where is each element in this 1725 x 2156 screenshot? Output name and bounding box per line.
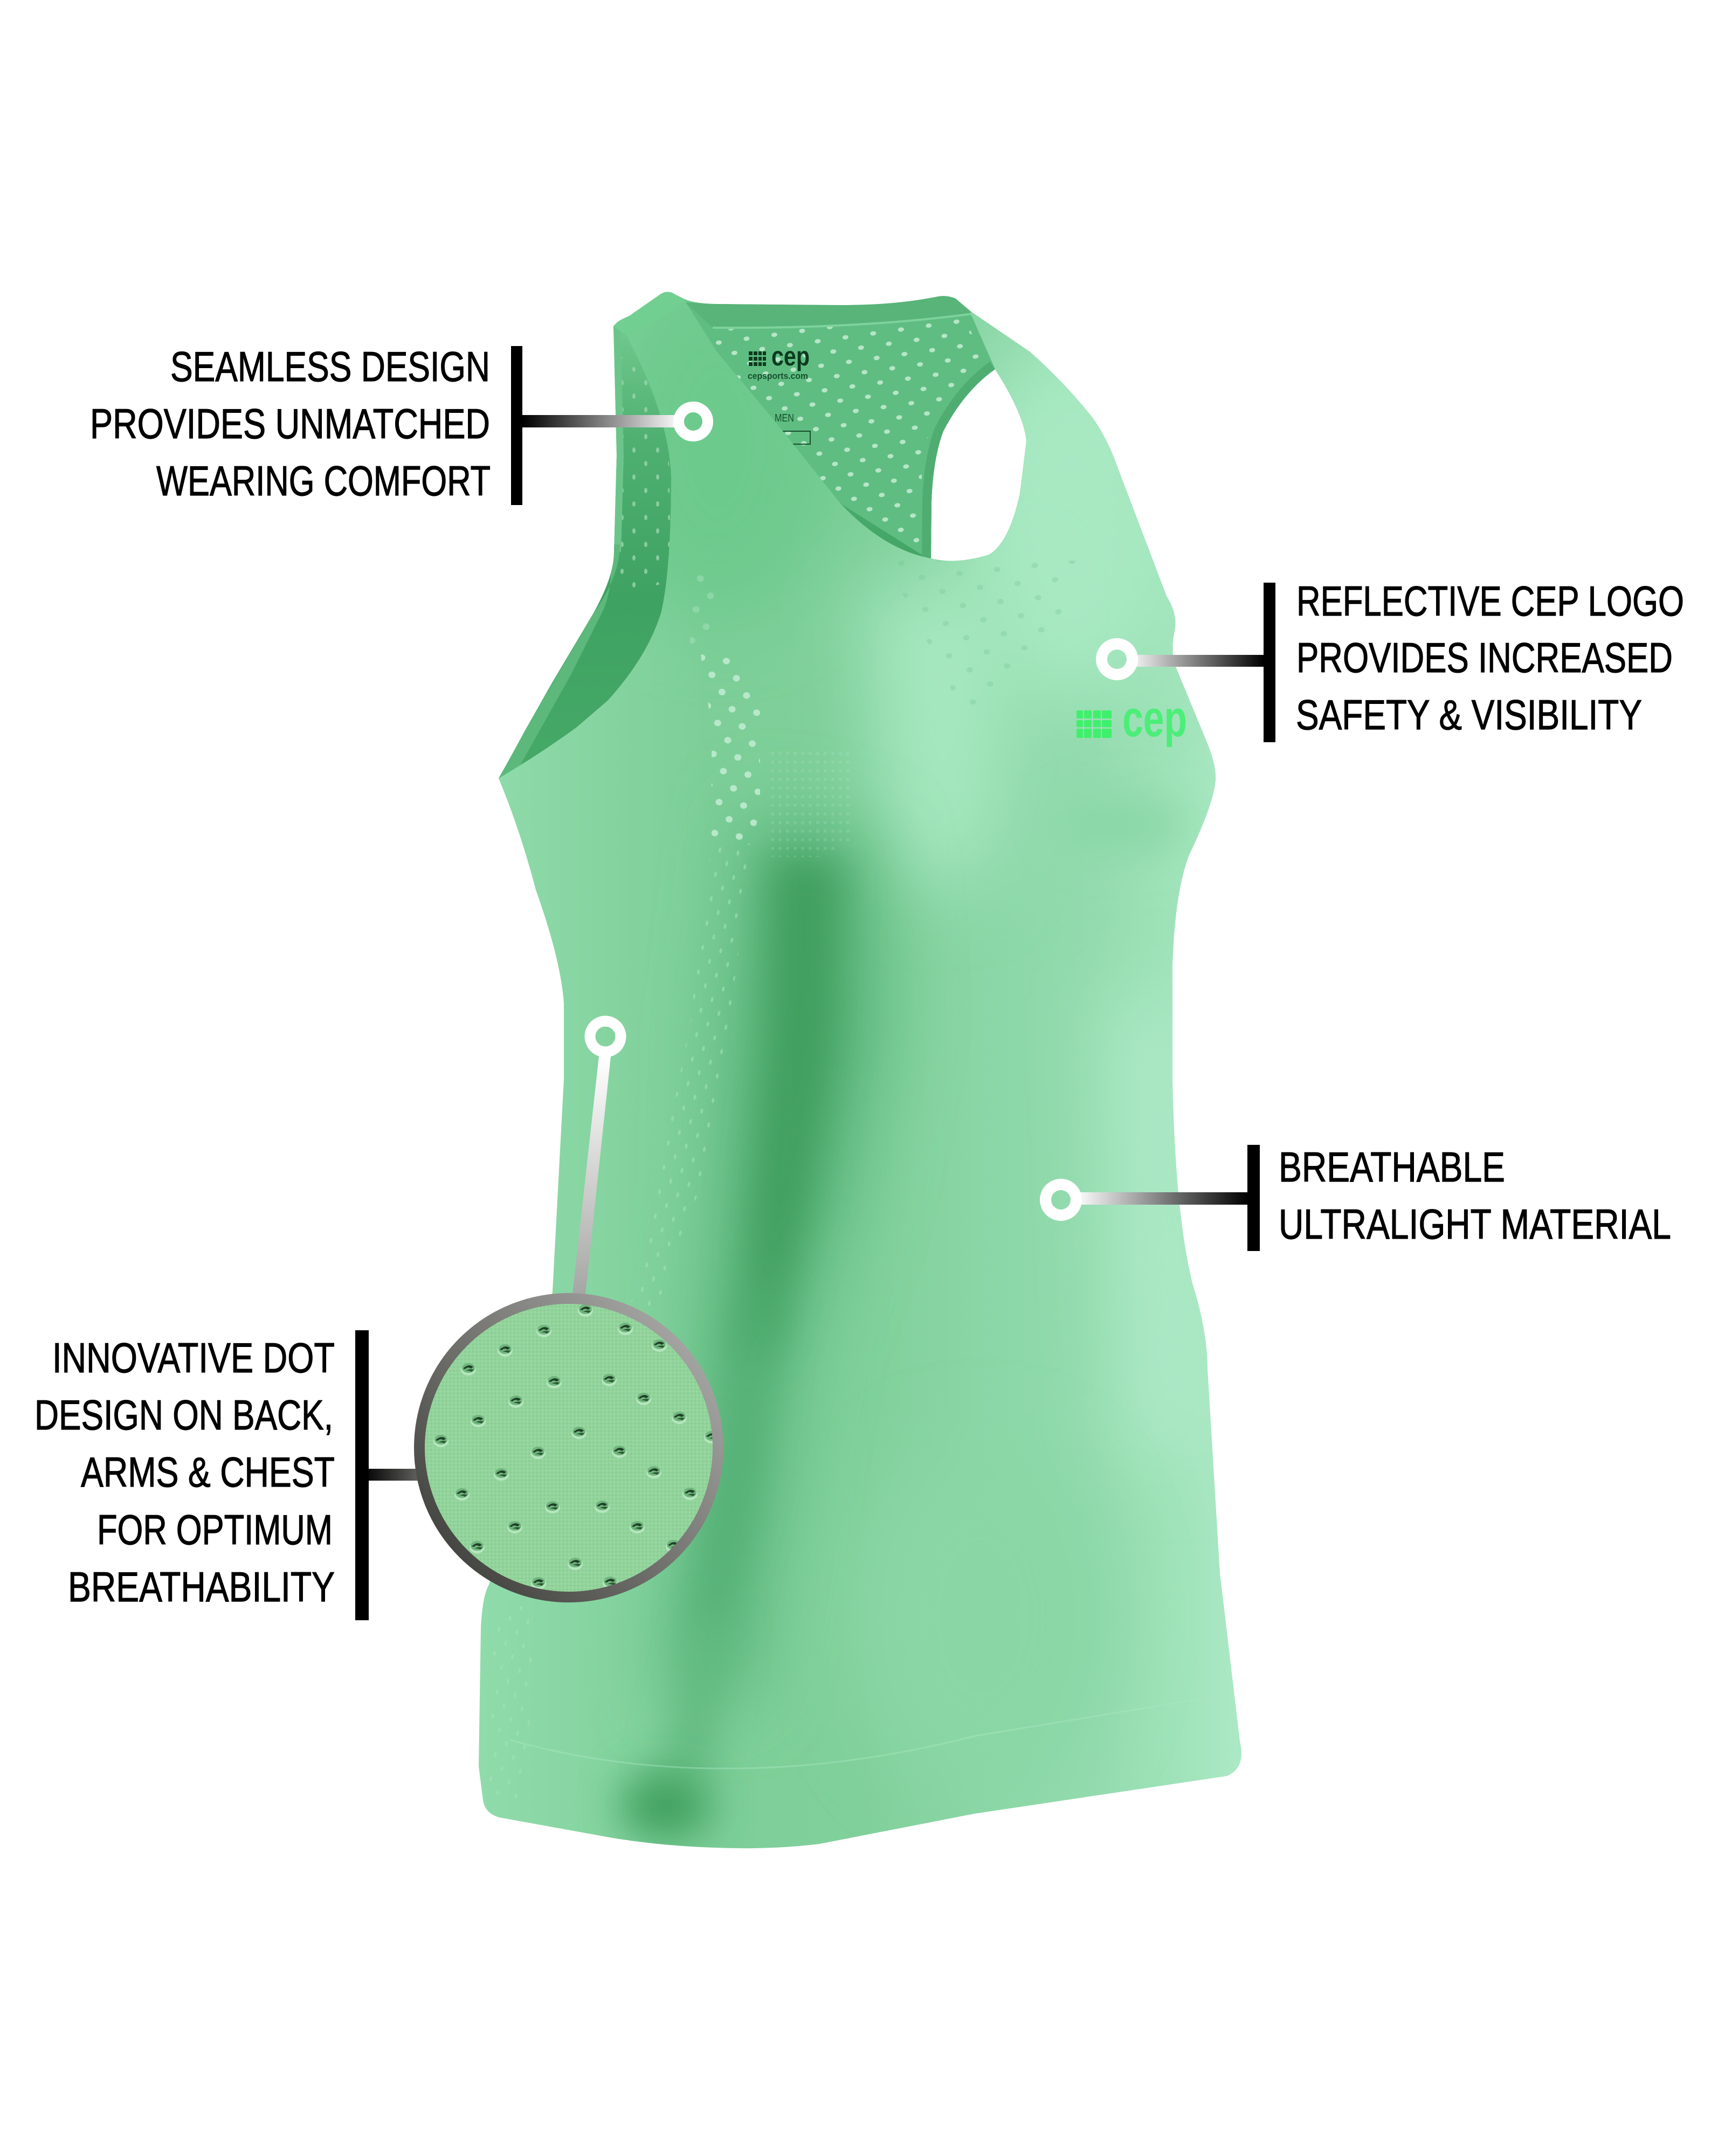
callout text: FOR OPTIMUM [97,1506,333,1553]
neck label: size text: MEN [775,412,794,424]
lens perforations [433,1304,719,1590]
marker ring [1102,644,1132,675]
front panel with shading [474,264,1251,1860]
callout text: DESIGN ON BACK, [34,1391,333,1439]
back mesh panel [686,302,995,561]
logo wordmark: cep [1122,690,1187,748]
callout bar [355,1330,369,1620]
tank top garment [474,264,1251,1860]
lens ring [419,1298,718,1597]
callout text: SEAMLESS DESIGN [170,343,490,390]
connector line [522,415,682,427]
marker ring [590,1021,621,1052]
callout text: BREATHABLE [1279,1143,1505,1191]
callout text: PROVIDES UNMATCHED [90,400,490,447]
callout text [90,343,491,505]
left outer seam [615,326,618,552]
shade: lower body [852,1445,1110,1789]
callout text: SAFETY & VISIBILITY [1296,691,1642,738]
neck label: website: cepsports.com [748,371,808,381]
left strap top band [613,292,686,338]
neck band lower edge [713,314,972,328]
side waffle texture [768,749,850,857]
neck label: cep logo: cep [771,341,810,371]
marker ring [1046,1185,1076,1215]
neck label: cep logo [749,341,810,371]
neck label: size box [776,431,810,444]
back neck band [686,296,972,328]
highlight: chest [862,582,1024,884]
inner left mesh dots [620,356,671,593]
hem perforations [488,1606,535,1800]
callout bar [1264,583,1275,742]
hem seam line [510,1695,1227,1768]
callout bar [1247,1145,1260,1251]
callout text [1296,577,1684,738]
reflective CEP logo on chest [1077,690,1187,748]
dark fold core [744,852,841,1369]
callout: seamless design [90,343,708,505]
callout: innovative dot design [34,1021,719,1620]
garment interior: back layer [474,286,1251,782]
callout text [34,1334,335,1611]
back mesh perforation dots [713,318,986,544]
callout: reflective logo [1102,577,1684,742]
highlight: right strap and shoulder [965,334,1181,701]
chest perforations [884,561,1078,722]
side panel faint perforations [615,844,752,1380]
side panel bright perforations [701,649,760,844]
shoulder-side perforations [690,571,722,647]
wide soft fold shadow [668,808,884,1698]
armhole binding on back panel [931,369,995,558]
marker ring [679,407,708,436]
callout: breathable material [1046,1143,1671,1251]
connector line [1075,1192,1247,1205]
lower fold shadow [663,1617,728,1779]
vertical connector from marker [572,1056,611,1299]
horizontal connector [369,1469,420,1481]
shade: below bust [1057,798,1186,852]
highlight: right side of waist [1110,997,1213,1455]
callout text: WEARING COMFORT [156,457,491,505]
callout text: ARMS & CHEST [81,1448,335,1496]
lower armhole seam band [499,544,620,778]
callout bar [511,346,522,505]
callout text: INNOVATIVE DOT [52,1334,335,1381]
infographic canvas [37,292,1683,1849]
fold beside lens [695,1294,776,1628]
magnified fabric lens [419,1298,719,1597]
shade: upper left strap [593,264,841,620]
connector line [1127,655,1264,667]
callout text [1279,1143,1671,1248]
shade: hem dark corner [620,1771,712,1841]
lens fabric weave [423,1302,714,1593]
logo grid [1077,710,1112,738]
callout text: BREATHABILITY [68,1563,335,1611]
